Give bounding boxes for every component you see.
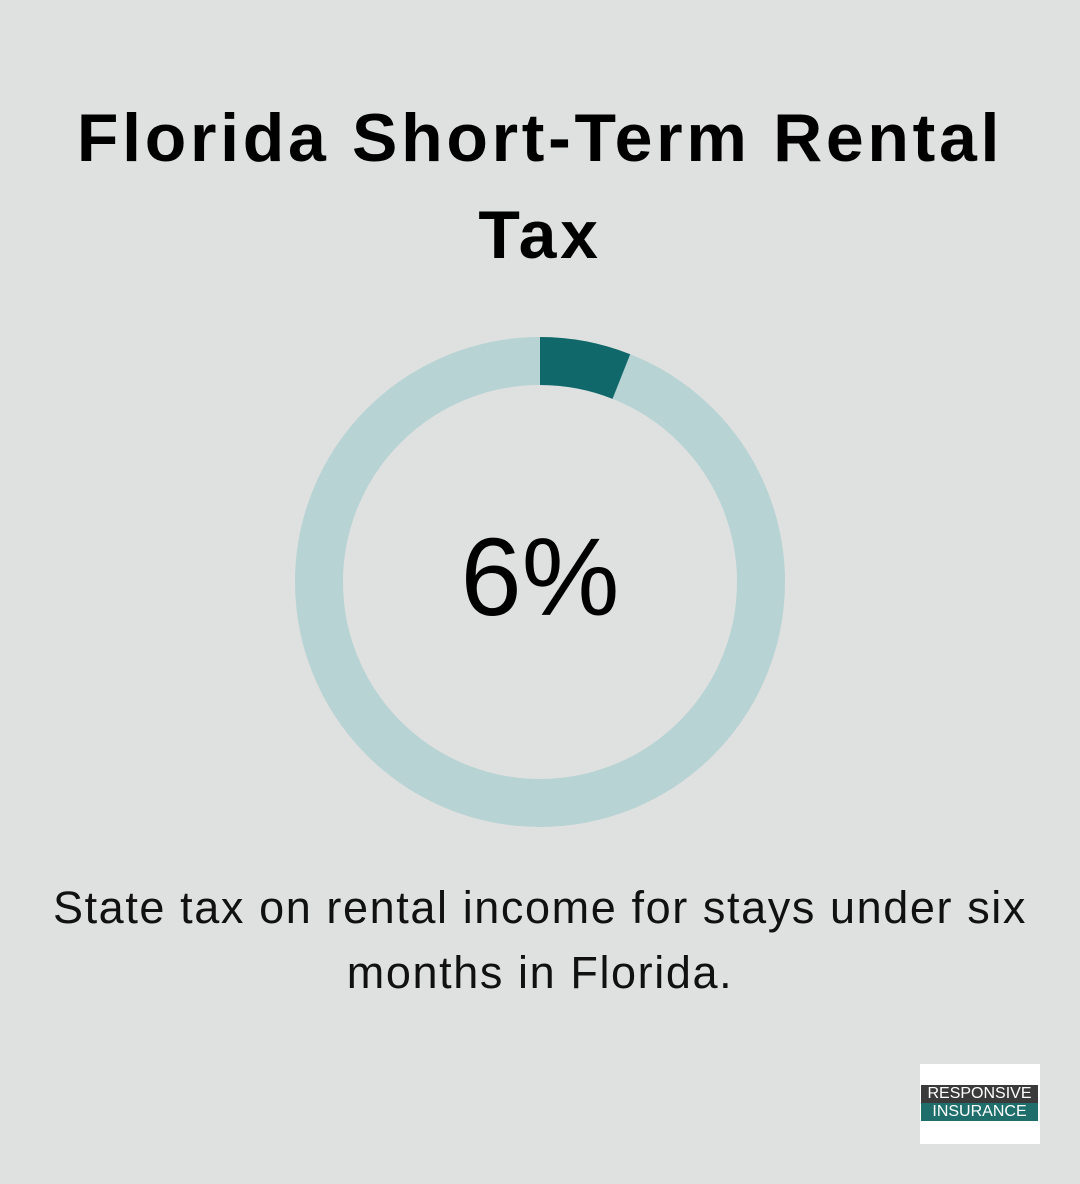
title: Tax [478,197,602,273]
title [77,100,1003,273]
description [53,882,1027,998]
title: Florida Short-Term Rental [77,100,1003,176]
donut chart: 6% [461,516,619,639]
logo [920,1064,1040,1144]
description: months in Florida. [347,947,733,998]
logo: INSURANCE [932,1103,1027,1120]
logo: RESPONSIVE [927,1085,1032,1102]
description: State tax on rental income for stays under six [53,882,1027,933]
